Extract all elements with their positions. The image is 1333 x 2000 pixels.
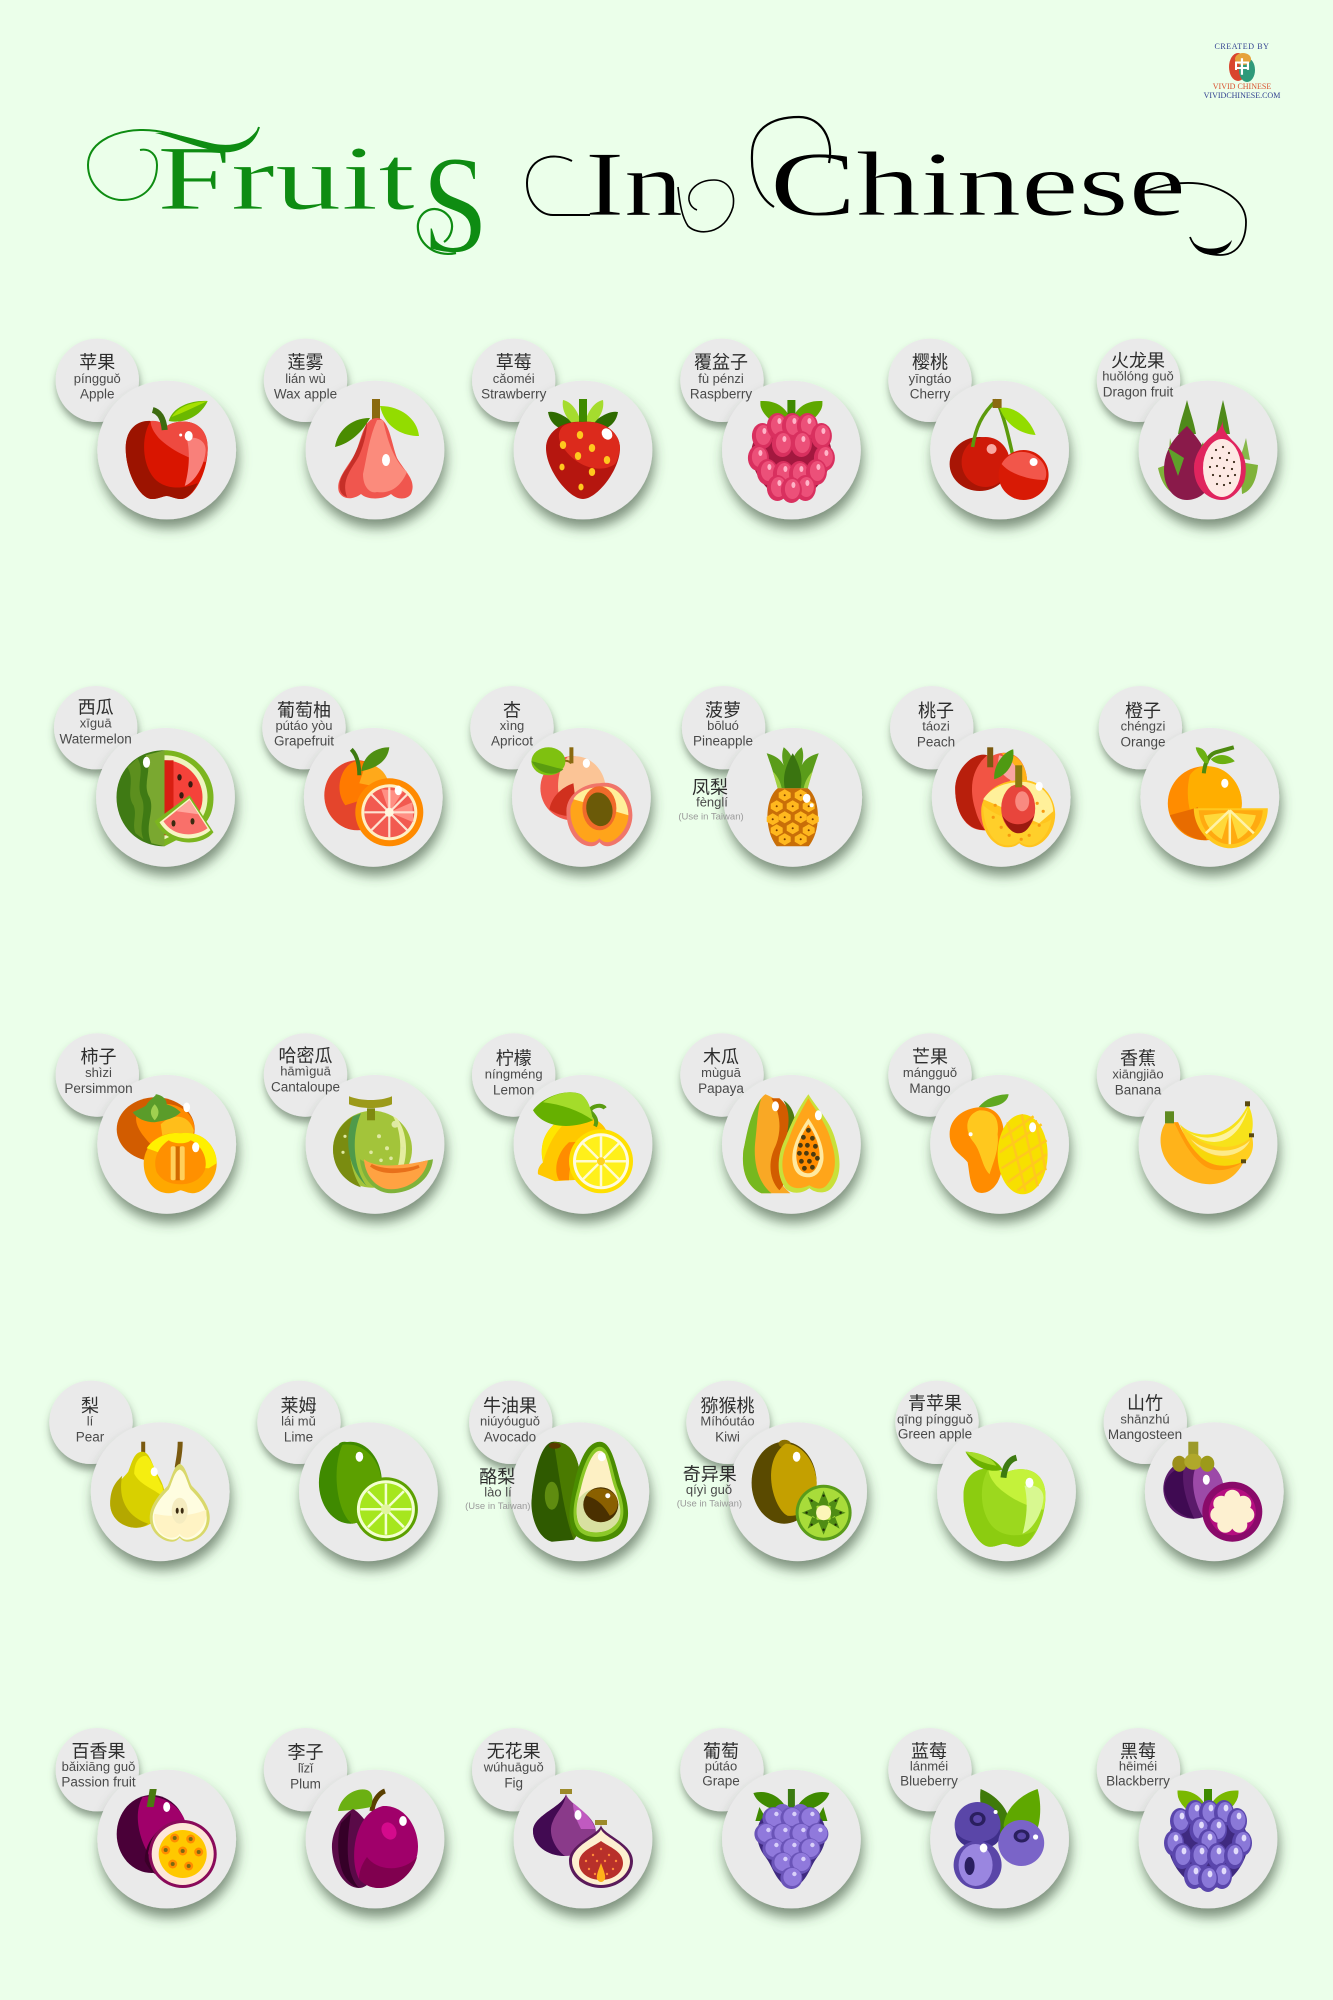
fruit circle (97, 381, 236, 519)
label text: Dragon fruit (1103, 385, 1174, 400)
label text: Blueberry (900, 1774, 958, 1789)
label text (1112, 1049, 1164, 1097)
label text (274, 700, 334, 749)
card: green apple (895, 1381, 1076, 1561)
label text: 樱桃 (912, 353, 948, 373)
label text: 苹果 (79, 353, 115, 373)
logo: Vivid Chinese: CREATED BY (1214, 42, 1270, 51)
icon: fig (533, 1789, 633, 1888)
label text (491, 700, 533, 749)
label text: 火龙果 (1111, 351, 1165, 371)
label bubble (895, 1381, 979, 1464)
label bubble (680, 1033, 764, 1117)
label text (900, 1742, 958, 1789)
label bubble (888, 339, 972, 422)
label text: Peach (917, 735, 955, 750)
label text: chéngzi (1121, 719, 1166, 734)
card: blueberry (888, 1728, 1069, 1908)
icon: pear (110, 1442, 210, 1542)
label text: shānzhú (1120, 1411, 1170, 1426)
label text: 杏 (503, 700, 521, 720)
card: pear (49, 1381, 230, 1561)
label text: Míhóutáo (700, 1414, 755, 1429)
label text: 葡萄 (703, 1742, 739, 1762)
icon: raspberry (748, 400, 835, 503)
label text: lánméi (910, 1759, 948, 1774)
fruit circle (306, 1770, 444, 1908)
label text: Plum (290, 1776, 321, 1791)
label text: 莲雾 (288, 353, 324, 373)
logo: Vivid Chinese: 中 (1234, 53, 1250, 78)
label text: Blackberry (1106, 1774, 1170, 1789)
label text: lǐzǐ (298, 1761, 314, 1776)
label bubble (1099, 686, 1182, 769)
label text (271, 1046, 340, 1095)
icon: cantaloupe (333, 1096, 433, 1193)
label text: 菠萝 (705, 700, 741, 720)
label text: Taiwan name: fènglí (696, 795, 728, 810)
label text: Cherry (910, 387, 950, 402)
label text: wúhuāguǒ (483, 1760, 544, 1775)
fruit circle (299, 1422, 438, 1561)
card: mango (888, 1033, 1069, 1214)
icon: papaya (743, 1094, 839, 1193)
label text: 山竹 (1127, 1393, 1163, 1413)
icon: grapefruit (324, 747, 423, 846)
icon: watermelon (116, 750, 214, 846)
label text: 橙子 (1125, 701, 1161, 721)
label text: hāmìguā (280, 1064, 332, 1079)
card: fig (472, 1728, 652, 1908)
label text: Orange (1120, 735, 1166, 750)
label bubble (262, 686, 346, 769)
label text: Persimmon (64, 1081, 133, 1096)
card: avocado (465, 1381, 649, 1561)
label text: 柿子 (80, 1047, 116, 1067)
label text: hēiméi (1119, 1759, 1157, 1774)
label text: Pineapple (693, 734, 753, 749)
label text: Mango (909, 1081, 951, 1096)
label text: yīngtáo (909, 371, 951, 386)
card: peach (890, 686, 1071, 867)
label text (903, 1047, 957, 1096)
label bubble (472, 1033, 555, 1117)
label text: mùguā (701, 1065, 742, 1080)
label text: níngméng (485, 1066, 543, 1081)
label text (483, 1742, 544, 1790)
label bubble (680, 339, 764, 422)
icon: persimmon (117, 1094, 217, 1193)
label bubble (257, 1381, 341, 1464)
label text (1106, 1742, 1170, 1789)
label text: Taiwan name: qíyì guǒ (686, 1482, 732, 1497)
label text: pútáo (705, 1759, 737, 1774)
label text: 西瓜 (78, 698, 114, 718)
label text (485, 1049, 543, 1097)
label text (280, 1396, 316, 1444)
card: papaya (680, 1033, 861, 1214)
label text: píngguǒ (74, 371, 121, 386)
icon: blackberry (1164, 1789, 1252, 1892)
title word: Fruits (88, 75, 488, 296)
label bubble (1097, 339, 1180, 422)
label text: pútáo yòu (275, 718, 333, 733)
label bubble (1097, 1728, 1180, 1811)
icon: apple (126, 401, 208, 499)
label text: Raspberry (690, 387, 752, 402)
label text: Apple (80, 387, 115, 402)
card: cantaloupe (264, 1033, 444, 1214)
label text (480, 1396, 540, 1444)
label text: 香蕉 (1120, 1049, 1156, 1069)
logo: Vivid Chinese: VIVIDCHINESE.COM (1204, 91, 1280, 100)
label bubble (890, 686, 974, 769)
label text: 黑莓 (1120, 1742, 1156, 1762)
icon: peach (955, 747, 1055, 847)
label bubble (686, 1381, 770, 1464)
label text: 草莓 (496, 353, 532, 373)
label text: 无花果 (487, 1742, 541, 1762)
label text: Apricot (491, 734, 533, 749)
fruit circle (932, 728, 1071, 867)
label text: 猕猴桃 (700, 1396, 754, 1416)
label text: 哈密瓜 (278, 1046, 332, 1066)
icon: orange (1168, 747, 1268, 848)
icon: lemon (533, 1092, 633, 1193)
label text: 葡萄柚 (277, 700, 331, 720)
label text (700, 1396, 755, 1444)
label text: lí (87, 1414, 94, 1429)
fruit circle (930, 381, 1069, 519)
fruit circle (514, 381, 652, 519)
label text (61, 1742, 136, 1790)
label text (702, 1742, 740, 1789)
label text: bǎixiāng guǒ (62, 1759, 135, 1774)
card: pineapple (678, 686, 862, 867)
label text: cǎoméi (493, 371, 535, 386)
label text: Grapefruit (274, 734, 334, 749)
label bubble (470, 686, 554, 769)
card: blackberry (1097, 1728, 1277, 1908)
card: apricot (470, 686, 651, 867)
icon: mango (950, 1094, 1048, 1194)
fruit circle (1139, 381, 1277, 519)
label text: 木瓜 (703, 1047, 739, 1067)
fruit circle (97, 1075, 236, 1214)
label text: Papaya (698, 1081, 744, 1096)
card: wax apple (264, 339, 444, 519)
label text: fù pénzi (698, 371, 744, 386)
label bubble (264, 1033, 347, 1117)
label text (64, 1047, 133, 1096)
icon: strawberry (546, 399, 620, 499)
icon: wax apple (335, 399, 419, 498)
label bubble (54, 686, 137, 769)
fruit circle (1139, 1075, 1277, 1214)
label text: Taiwan name: lào lí (484, 1485, 512, 1500)
label bubble (888, 1033, 972, 1117)
label bubble (888, 1728, 972, 1811)
label bubble (49, 1381, 133, 1464)
icon: cherry (950, 399, 1049, 500)
label text: mángguǒ (903, 1065, 957, 1080)
label text: Pear (76, 1429, 105, 1444)
fruit circle (937, 1422, 1076, 1561)
label text: Taiwan name: 酪梨 (479, 1467, 515, 1487)
fruit circle (1139, 1770, 1277, 1908)
fruit circle (722, 1770, 861, 1908)
card: banana (1097, 1033, 1277, 1214)
label text (698, 1047, 744, 1096)
label text (274, 353, 337, 402)
label bubble (264, 339, 347, 422)
label bubble (472, 339, 555, 422)
label text: 百香果 (72, 1742, 126, 1762)
icon: avocado (531, 1442, 628, 1542)
label text: Avocado (484, 1429, 536, 1444)
label bubble (1097, 1033, 1180, 1117)
label bubble (472, 1728, 555, 1811)
label bubble (264, 1728, 347, 1811)
card: strawberry (472, 339, 652, 519)
icon: grape (753, 1789, 829, 1889)
label text: 桃子 (918, 701, 954, 721)
title word: Chinese: Chinese (770, 133, 1186, 235)
label text: Lemon (493, 1082, 534, 1097)
label text: huǒlóng guǒ (1102, 369, 1174, 384)
logo: Vivid Chinese (1204, 42, 1280, 100)
label text: Taiwan name: (Use in Taiwan) (678, 812, 744, 823)
label text: Taiwan name: 凤梨 (692, 778, 728, 798)
icon: blueberry (954, 1789, 1044, 1889)
label text: Strawberry (481, 387, 547, 402)
label text: lái mǔ (281, 1414, 316, 1429)
label text (897, 1393, 973, 1442)
title word: Fruits: s (422, 75, 488, 296)
card: grapefruit (262, 686, 443, 867)
label text: Wax apple (274, 387, 337, 402)
label text: lián wù (285, 371, 326, 386)
fruit circle (304, 728, 443, 867)
fruit circle (510, 1422, 649, 1561)
icon: passion fruit (117, 1789, 217, 1888)
fruit circle (306, 381, 444, 519)
fruit circle (306, 1075, 444, 1214)
card: apple (56, 339, 236, 519)
label text (693, 700, 753, 749)
label text: Watermelon (60, 731, 132, 746)
label text: Kiwi (715, 1429, 740, 1444)
fruit circle (1145, 1422, 1284, 1561)
label bubble (56, 1033, 139, 1117)
title word: Fruits: Fruit (157, 127, 416, 229)
label bubble (469, 1381, 552, 1464)
card: raspberry (680, 339, 861, 519)
icon: apricot (531, 747, 632, 846)
icon: banana (1161, 1101, 1254, 1184)
label text: táozi (922, 719, 950, 734)
label text (909, 353, 951, 402)
fruit circle (1140, 728, 1279, 867)
fruit circle (722, 1075, 861, 1214)
label text: xìng (500, 718, 524, 733)
label bubble (56, 1728, 139, 1811)
label text (74, 353, 121, 402)
icon: pineapple (767, 747, 819, 846)
label bubble (1104, 1381, 1187, 1464)
label bubble (56, 339, 139, 422)
label bubble (682, 686, 765, 769)
label text: Grape (702, 1774, 740, 1789)
card: dragon fruit (1097, 339, 1277, 519)
card: persimmon (56, 1033, 236, 1214)
label text: Green apple (898, 1427, 972, 1442)
label text: xīguā (80, 716, 112, 731)
label text (76, 1396, 105, 1444)
fruit circle (514, 1770, 652, 1908)
label text: 芒果 (912, 1047, 948, 1067)
label text: qīng píngguǒ (897, 1411, 973, 1426)
card: kiwi (677, 1381, 867, 1561)
card: plum (264, 1728, 444, 1908)
fruit circle (91, 1422, 230, 1561)
icon: green apple (964, 1452, 1046, 1547)
label text: Taiwan name (678, 778, 744, 823)
label text (1102, 351, 1174, 400)
fruit circle (930, 1770, 1069, 1908)
fruit circle (96, 728, 235, 867)
icon: dragon fruit (1158, 400, 1258, 500)
icon: mangosteen (1163, 1442, 1262, 1542)
card: cherry (888, 339, 1069, 519)
icon: lime (319, 1442, 418, 1541)
card: watermelon (54, 686, 235, 867)
label text: Passion fruit (61, 1775, 136, 1790)
label text (917, 701, 955, 750)
card: grape (680, 1728, 861, 1908)
card: mangosteen (1104, 1381, 1284, 1561)
label text: Fig (504, 1775, 523, 1790)
label text: Mangosteen (1108, 1427, 1182, 1442)
label text: 蓝莓 (911, 1742, 947, 1762)
label text: xiāngjiāo (1112, 1066, 1164, 1081)
card: lime (257, 1381, 438, 1561)
card: passion fruit (56, 1728, 236, 1908)
logo: Vivid Chinese: VIVID CHINESE (1213, 82, 1271, 91)
label text: Taiwan name: (Use in Taiwan) (677, 1499, 742, 1510)
label text (481, 353, 547, 402)
title word: In (527, 133, 734, 235)
fruit circle (930, 1075, 1069, 1214)
label text: 覆盆子 (694, 353, 748, 373)
label text: Taiwan name: (Use in Taiwan) (465, 1501, 530, 1512)
card: orange (1099, 686, 1279, 867)
fruit circle (97, 1770, 236, 1908)
icon: plum (332, 1789, 418, 1888)
fruit circle (514, 1075, 652, 1214)
label text: Banana (1115, 1082, 1162, 1097)
label bubble (680, 1728, 764, 1811)
label text: 青苹果 (908, 1393, 962, 1413)
label text (690, 353, 752, 402)
title (88, 75, 1246, 296)
fruit circle (512, 728, 651, 867)
icon: kiwi (752, 1440, 852, 1541)
label text: 柠檬 (496, 1049, 532, 1069)
label text (60, 698, 132, 746)
label text: Taiwan name (677, 1464, 742, 1510)
fruit circle (728, 1422, 867, 1561)
label text: shìzi (85, 1065, 112, 1080)
label text (288, 1743, 324, 1791)
card: lemon (472, 1033, 652, 1214)
fruit circle (722, 381, 861, 519)
label text: Lime (284, 1429, 313, 1444)
label text: Taiwan name: 奇异果 (683, 1464, 737, 1484)
label text: Taiwan name (465, 1467, 530, 1512)
label text: 李子 (288, 1743, 324, 1763)
label text: Cantaloupe (271, 1080, 340, 1095)
label text: bōluó (707, 718, 739, 733)
label text (1120, 701, 1166, 750)
label text: 梨 (81, 1396, 99, 1416)
label text: 牛油果 (483, 1396, 537, 1416)
fruit circle (723, 728, 862, 867)
label text: niúyóuguǒ (480, 1414, 540, 1429)
label text: 莱姆 (280, 1396, 316, 1416)
title word: Chinese (752, 117, 1246, 255)
label text (1108, 1393, 1182, 1442)
title word: In: In (585, 133, 683, 235)
